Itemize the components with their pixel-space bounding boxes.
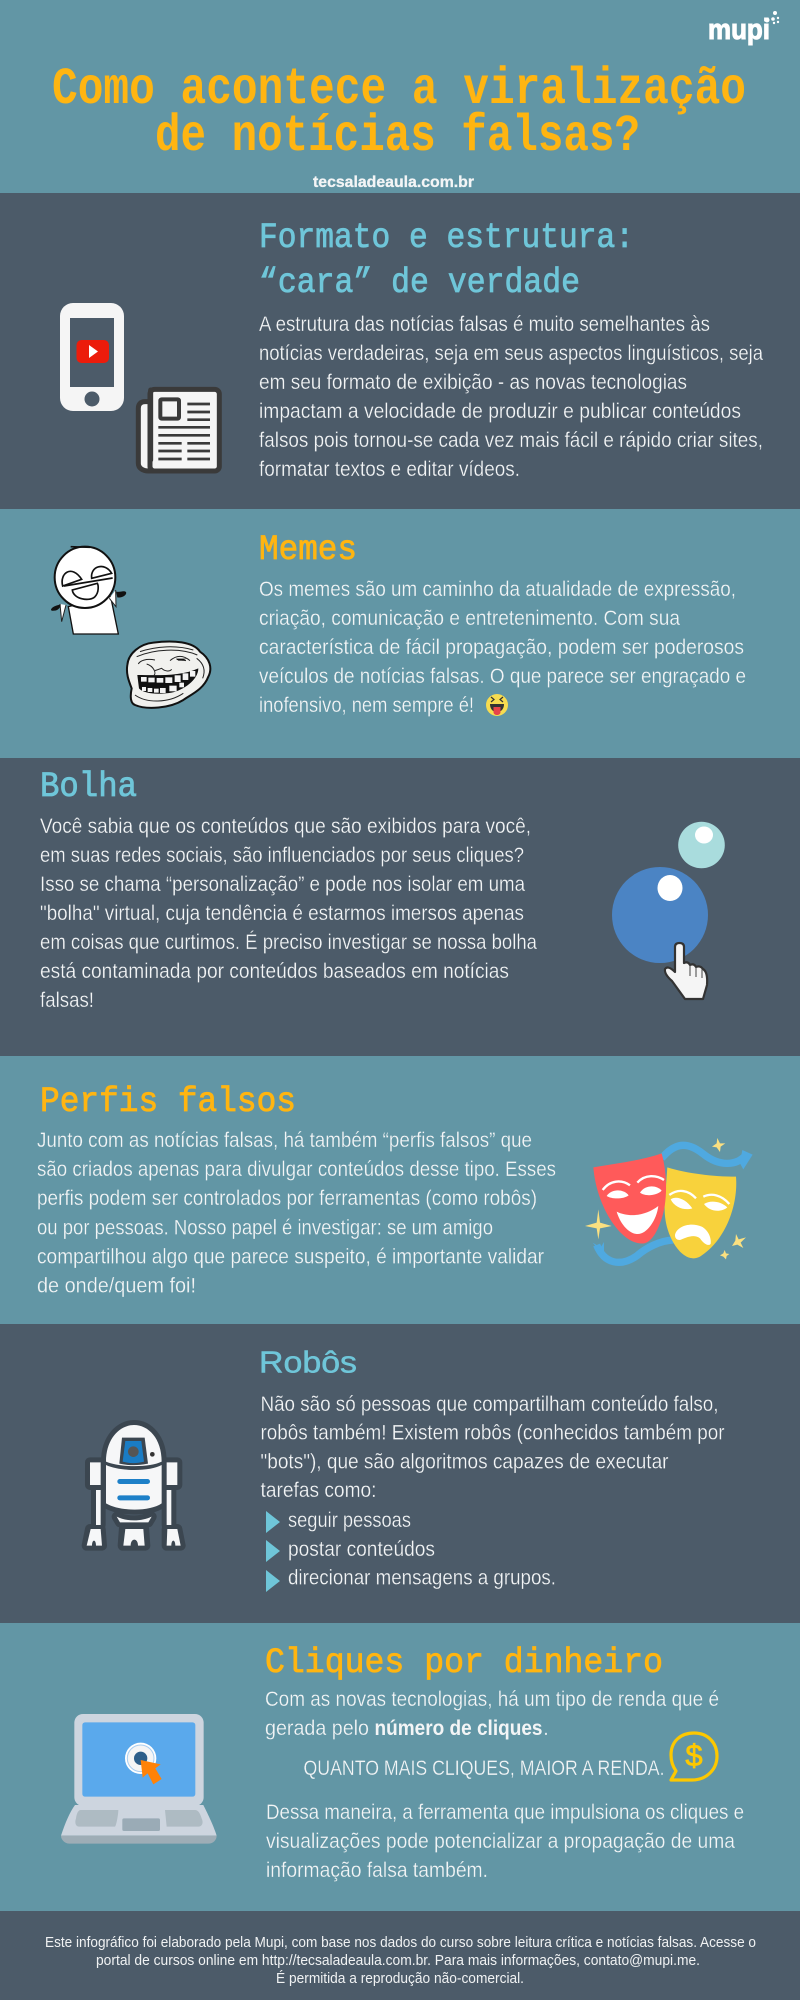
heading: robôs: Robôs — [259, 1344, 357, 1380]
text block: formato — [259, 312, 763, 481]
panel: robôs — [0, 1324, 800, 1623]
text block: perfis falsos: Junto com as notícias falsas, há também “perfis falsos” que — [37, 1128, 532, 1152]
text block: cliques intro: gerada pelo — [265, 1716, 369, 1740]
icon: newspaper — [138, 389, 219, 471]
title — [52, 60, 746, 166]
text block: bolha: Isso se chama “personalização” e pode nos isolar em uma — [40, 872, 525, 896]
text block: cliques intro: Com as novas tecnologias, há um tipo de renda que é — [265, 1687, 719, 1711]
icon: laughing emoji — [486, 694, 508, 716]
text block: perfis falsos: são criados apenas para divulgar conteúdos desse tipo. Esses — [37, 1157, 556, 1181]
text block: memes — [259, 577, 746, 717]
text block: perfis falsos: perfis podem ser controlados por ferramentas (como robôs) — [37, 1186, 537, 1210]
text block: cliques conclusion — [266, 1800, 744, 1882]
website address: tecsaladeaula.com.br — [313, 174, 474, 191]
text block: cliques conclusion: Dessa maneira, a ferramenta que impulsiona os cliques e — [266, 1800, 744, 1824]
icon: robot — [87, 1425, 181, 1546]
heading: perfis falsos: Perfis falsos — [40, 1082, 296, 1122]
list: robot tasks — [266, 1508, 556, 1592]
text block: robôs — [260, 1392, 724, 1502]
panel: memes — [0, 509, 800, 758]
text block: bolha: está contaminada por conteúdos baseados em notícias — [40, 959, 509, 983]
text block: memes: veículos de notícias falsas. O que parece ser engraçado e — [259, 664, 746, 688]
panel: cliques por dinheiro — [0, 1623, 800, 1911]
heading: formato e estrutura: Formato e estrutura: — [259, 218, 634, 258]
text block: formato: A estrutura das notícias falsas é muito semelhantes às — [259, 312, 710, 336]
icon: troll face — [127, 642, 210, 708]
heading: memes: Memes — [259, 530, 357, 570]
logo: mupi: mupi — [708, 14, 770, 46]
text block: cliques conclusion: informação falsa também. — [266, 1858, 488, 1882]
text block: robôs: tarefas como: — [260, 1478, 376, 1502]
text block: robôs: "bots"), que são algoritmos capazes de executar — [260, 1450, 668, 1474]
text block: perfis falsos: de onde/quem foi! — [37, 1274, 196, 1298]
text block: bolha: em suas redes sociais, são influenciados por seus cliques? — [40, 843, 524, 867]
title: de notícias falsas? — [155, 107, 640, 166]
text block: bolha — [40, 814, 537, 1012]
panel: header — [0, 0, 800, 193]
icon: dollar speech bubble — [671, 1733, 717, 1780]
panel: perfis falsos — [0, 1056, 800, 1324]
icon: dollar speech bubble: $ — [685, 1738, 703, 1773]
text block: memes: criação, comunicação e entretenimento. Com sua — [259, 606, 680, 630]
text block: bolha: falsas! — [40, 988, 94, 1012]
panel: bolha — [0, 758, 800, 1056]
icon: theater masks — [585, 1138, 753, 1262]
text block: formato: em seu formato de exibição - as novas tecnologias — [259, 370, 687, 394]
text block: memes: característica de fácil propagação, podem ser poderosos — [259, 635, 744, 659]
text block: cliques conclusion: visualizações pode potencializar a propagação de uma — [266, 1829, 735, 1853]
text block: perfis falsos — [37, 1128, 556, 1298]
text block: formato: formatar textos e editar vídeos. — [259, 457, 520, 481]
heading: cliques por dinheiro: Cliques por dinheiro — [265, 1643, 663, 1683]
panel: formato e estrutura — [0, 193, 800, 509]
text block: credits — [45, 1934, 756, 1987]
icon: bubbles and pointer hand — [612, 822, 725, 999]
text block: cliques intro: . — [543, 1716, 549, 1740]
text block: cliques intro: número de cliques — [374, 1716, 543, 1740]
text block: memes: Os memes são um caminho da atualidade de expressão, — [259, 577, 736, 601]
text block: formato: impactam a velocidade de produzir e publicar conteúdos — [259, 399, 741, 423]
text block: perfis falsos: ou por pessoas. Nosso papel é investigar: se um amigo — [37, 1216, 493, 1240]
callout: quanto mais cliques: QUANTO MAIS CLIQUES, MAIOR A RENDA. — [304, 1756, 664, 1780]
panel: footer — [0, 1911, 800, 2000]
text block: perfis falsos: compartilhou algo que parece suspeito, é importante validar — [37, 1244, 544, 1268]
heading: formato e estrutura: “cara” de verdade — [259, 263, 580, 303]
heading: bolha: Bolha — [40, 767, 137, 807]
icon: rage comic laughing face — [51, 547, 126, 634]
text block: robôs: robôs também! Existem robôs (conhecidos também por — [260, 1420, 724, 1444]
list: robot tasks: direcionar mensagens a grupos. — [288, 1566, 556, 1590]
heading: formato e estrutura — [259, 218, 634, 303]
text block: credits: É permitida a reprodução não-comercial. — [276, 1970, 524, 1987]
icon: smartphone with video — [60, 303, 124, 411]
list: robot tasks: postar conteúdos — [288, 1537, 435, 1561]
text block: robôs: Não são só pessoas que compartilham conteúdo falso, — [260, 1392, 718, 1416]
text block: bolha: em coisas que curtimos. É preciso investigar se nossa bolha — [40, 929, 537, 954]
text block: credits: portal de cursos online em http://tecsaladeaula.com.br. Para mais informações, contato@mupi.me. — [96, 1952, 700, 1969]
icon: laptop with click — [61, 1714, 217, 1844]
text block: memes: inofensivo, nem sempre é! — [259, 693, 474, 717]
text block: cliques intro — [265, 1687, 719, 1740]
text block: bolha: "bolha" virtual, cuja tendência é estarmos imersos apenas — [40, 901, 524, 925]
text block: bolha: Você sabia que os conteúdos que são exibidos para você, — [40, 814, 531, 838]
list: robot tasks: seguir pessoas — [288, 1508, 411, 1532]
